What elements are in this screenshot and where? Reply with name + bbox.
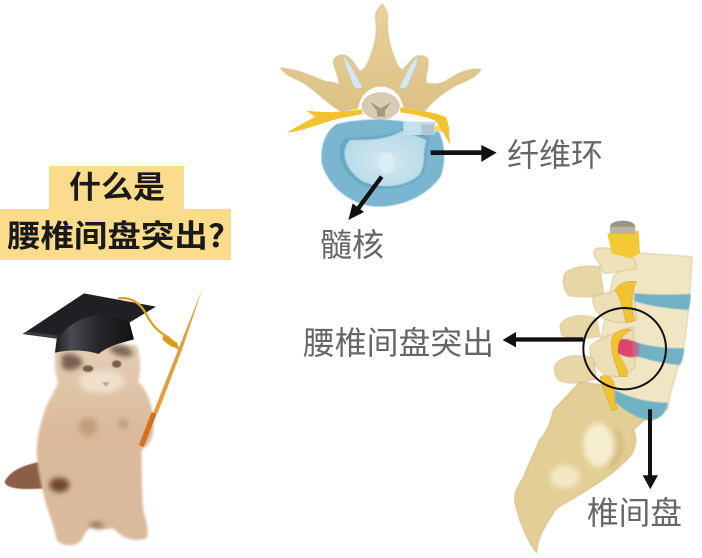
cat tail <box>5 462 43 489</box>
annulus dark inner edge <box>340 128 430 189</box>
label: herniated disc: 腰椎间盘突出 <box>303 325 494 361</box>
label: intervertebral disc: 椎间盘 <box>587 495 682 531</box>
sacrum highlights <box>550 423 621 488</box>
title highlight: line 1 <box>49 166 184 209</box>
annulus fibrosus <box>321 119 444 207</box>
cap tassel <box>118 298 178 349</box>
pointer <box>153 288 203 414</box>
intervertebral disc <box>321 119 444 207</box>
cat face <box>83 360 121 387</box>
spinal cord <box>362 93 399 119</box>
nucleus pulposus <box>345 131 427 186</box>
disc patch <box>403 122 449 135</box>
label: nucleus pulposus: 髓核 <box>320 227 384 263</box>
arrow: to annulus label <box>431 145 497 162</box>
title highlight: line 2 <box>0 209 231 260</box>
herniated disc <box>617 339 642 357</box>
highlight circle <box>583 308 666 389</box>
spinal cord stump <box>607 221 640 258</box>
arrow: to herniation label <box>503 332 583 347</box>
right nerve root <box>400 107 451 145</box>
label: annulus fibrosus: 纤维环 <box>507 137 603 173</box>
articular facets <box>344 55 417 89</box>
nerve roots <box>600 281 637 411</box>
sacrum <box>515 382 648 553</box>
arrow: to disc label <box>643 409 658 489</box>
processes and arches <box>554 248 637 383</box>
title line 1: 什么是 <box>69 162 165 207</box>
lumbar vertebral bodies <box>600 253 692 410</box>
title <box>0 162 231 260</box>
icon: cat with graduation cap and pointer <box>5 288 203 545</box>
intervertebral discs <box>615 293 691 421</box>
diagram: lumbar spine side view <box>503 221 692 553</box>
cat markings <box>49 345 133 528</box>
graduation cap <box>23 293 156 354</box>
cat body <box>37 345 154 545</box>
arrow: to nucleus label <box>348 177 382 220</box>
title line 2: 腰椎间盘突出? <box>7 211 225 256</box>
diagram: vertebra top view <box>281 4 497 220</box>
bony arch <box>281 4 481 112</box>
spinal canal <box>357 87 404 119</box>
left nerve root <box>287 109 363 133</box>
